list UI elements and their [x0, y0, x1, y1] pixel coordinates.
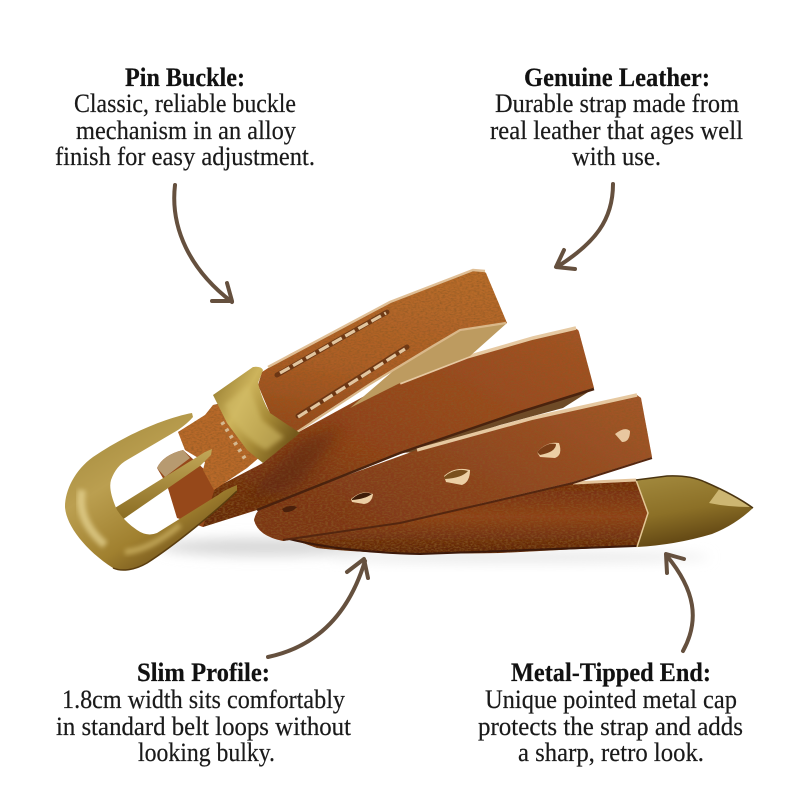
- strap: top loop with stitching: [258, 270, 507, 433]
- heading block: Slim Profile: looking bulky.: [138, 738, 275, 767]
- heading block: Pin Buckle: [55, 63, 315, 171]
- buckle pin: [110, 449, 212, 520]
- heading block: Genuine Leather: Genuine Leather:: [524, 63, 710, 92]
- upper stitches: [277, 312, 387, 375]
- heading block: Metal-Tipped End: [478, 658, 743, 767]
- strap: underside between second and third loops: [400, 389, 593, 453]
- heading block: Genuine Leather: Durable strap made from: [495, 89, 739, 118]
- heading block: Metal-Tipped End: Metal-Tipped End:: [511, 658, 711, 687]
- heading block: Metal-Tipped End: a sharp, retro look.: [518, 738, 704, 767]
- heading block: Pin Buckle: finish for easy adjustment.: [55, 142, 315, 171]
- heading block: Slim Profile: [56, 658, 352, 767]
- arrow: to pin buckle: [174, 185, 232, 302]
- heading block: Slim Profile: Slim Profile:: [137, 658, 270, 687]
- heading block: Metal-Tipped End: protects the strap and adds: [478, 712, 743, 741]
- heading block: Slim Profile: 1.8cm width sits comfortably: [62, 685, 345, 714]
- strap: bottom loop: [283, 480, 648, 554]
- arrow: to genuine leather: [556, 184, 613, 269]
- metal tip: [636, 476, 753, 547]
- heading block: Slim Profile: in standard belt loops without: [56, 712, 352, 741]
- heading block: Pin Buckle: Pin Buckle:: [125, 63, 245, 92]
- heading block: Genuine Leather: with use.: [572, 142, 661, 171]
- heading block: Metal-Tipped End: Unique pointed metal cap: [485, 685, 737, 714]
- belt photo illustration: [65, 270, 753, 570]
- strap: third loop with holes: [254, 395, 652, 541]
- heading block: Pin Buckle: Classic, reliable buckle: [74, 89, 296, 118]
- belt holes: [282, 429, 630, 512]
- strap: second loop: [203, 328, 594, 527]
- buckle keeper: [213, 367, 300, 463]
- heading block: Genuine Leather: [490, 63, 743, 171]
- lower stitches: [298, 347, 407, 417]
- ground shadow: [160, 538, 710, 562]
- arrow: to slim profile: [268, 559, 368, 657]
- buckle loop strap: [178, 400, 268, 490]
- buckle frame: [65, 413, 237, 570]
- strap: tan underside of top loop: [350, 323, 507, 408]
- heading block: Genuine Leather: real leather that ages well: [490, 116, 743, 145]
- heading block: Pin Buckle: mechanism in an alloy: [76, 116, 296, 145]
- strap: back piece behind buckle: [157, 450, 237, 527]
- arrow: to metal-tipped end: [666, 554, 693, 651]
